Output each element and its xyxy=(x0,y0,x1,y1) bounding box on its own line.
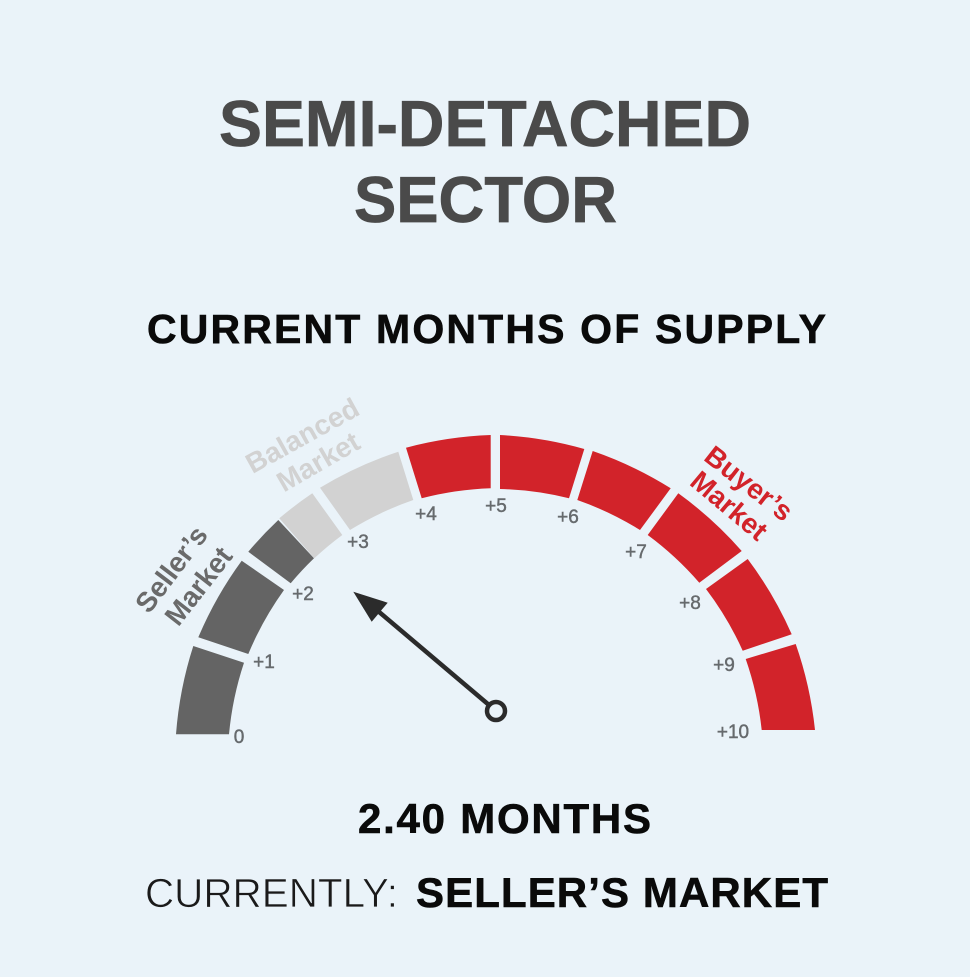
current market status: SELLER’S MARKET xyxy=(416,869,828,916)
scale labels: +3 xyxy=(347,532,369,553)
scale labels: +6 xyxy=(557,507,579,528)
scale labels: +9 xyxy=(713,655,735,676)
scale labels: +2 xyxy=(292,584,314,605)
title: SEMI-DETACHED xyxy=(219,87,751,160)
scale labels: +5 xyxy=(485,496,507,517)
scale labels: +4 xyxy=(415,504,437,525)
label: buyer's market: Market xyxy=(685,465,774,547)
gauge xyxy=(129,392,815,748)
months value: 2.40 MONTHS xyxy=(358,795,651,842)
subtitle: current months of supply: CURRENT MONTHS OF SUPPLY xyxy=(147,306,826,352)
current market status xyxy=(145,869,828,916)
label: seller's market: Market xyxy=(159,541,239,631)
label: seller's market: Seller’s xyxy=(129,520,214,618)
scale labels: +10 xyxy=(717,722,749,743)
title: SECTOR xyxy=(354,163,617,236)
gauge segments: balanced market xyxy=(279,452,413,558)
title xyxy=(219,87,751,236)
scale labels: +8 xyxy=(679,593,701,614)
label: balanced market: Balanced xyxy=(240,392,364,479)
gauge segments: buyer's market xyxy=(406,435,815,730)
scale labels: 0 xyxy=(234,727,244,748)
gauge segments: seller's market xyxy=(176,520,314,734)
scale labels: +1 xyxy=(253,652,275,673)
needle xyxy=(353,592,505,720)
label: seller's market xyxy=(129,520,239,631)
scale labels xyxy=(234,496,749,748)
current market status: CURRENTLY: xyxy=(145,870,398,916)
label: balanced market: Market xyxy=(271,426,365,498)
scale labels: +7 xyxy=(625,542,647,563)
label: buyer's market: Buyer’s xyxy=(699,440,799,527)
